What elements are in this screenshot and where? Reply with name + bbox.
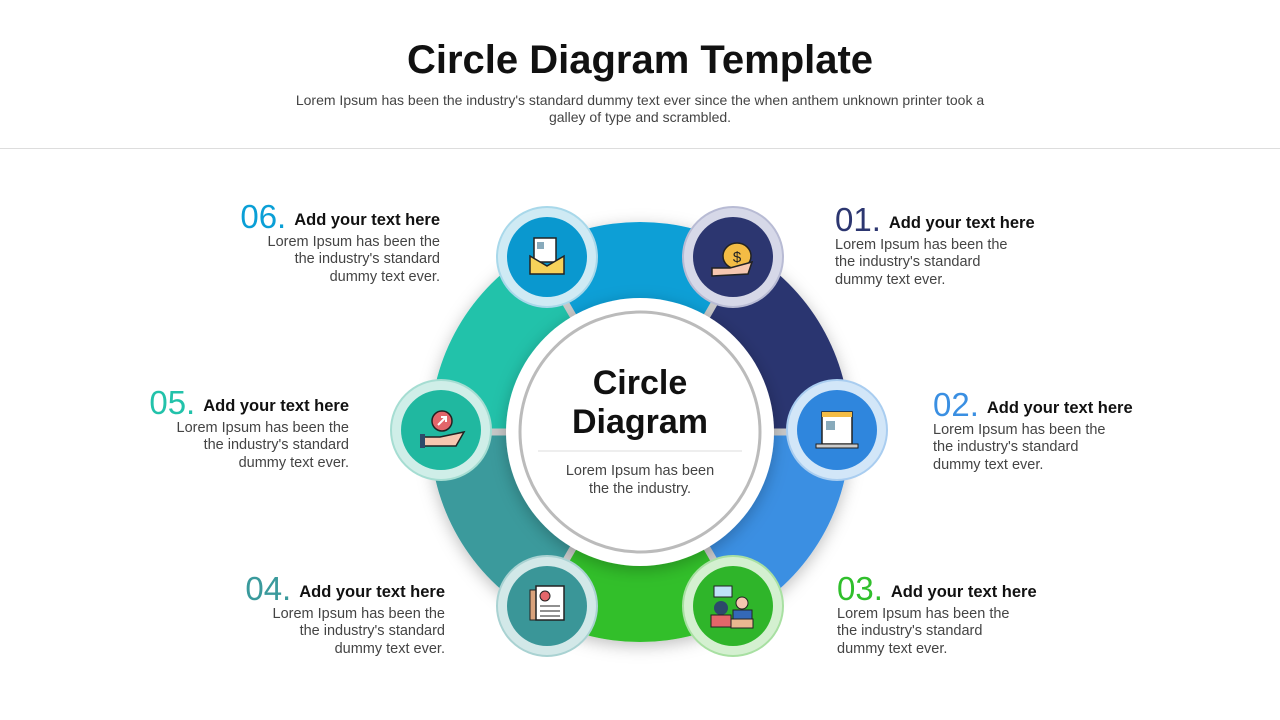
subtitle: galley of type and scrambled. [549,109,731,125]
item 01: 01. Add your text here [835,201,1035,238]
center circle: Lorem Ipsum has been [566,463,714,479]
node 01 money bag [683,207,783,307]
ring segments [430,222,850,642]
item 04: the industry's standard [300,623,445,639]
item 02: dummy text ever. [933,456,1043,472]
title: Circle Diagram Template [407,38,873,82]
node 03 people [683,556,783,656]
item 03 [837,570,1037,656]
center circle: the the industry. [589,481,691,497]
node 06 envelope [497,207,597,307]
item 06: the industry's standard [295,251,440,267]
item 02: the industry's standard [933,439,1078,455]
item 06: Lorem Ipsum has been the [268,234,440,250]
item 01: dummy text ever. [835,272,945,288]
item 01 [835,201,1035,288]
item 02 [933,386,1133,472]
item 01: Lorem Ipsum has been the [835,236,1008,252]
center circle: Diagram [572,403,708,441]
node 02 laptop [787,380,887,480]
item 04: dummy text ever. [335,640,445,656]
item 03: 03. Add your text here [837,570,1037,607]
center circle: Circle [593,364,687,402]
item 03: dummy text ever. [837,640,947,656]
item 06 [240,198,440,284]
item 06: dummy text ever. [330,268,440,284]
node 04 document [497,556,597,656]
item 03: the industry's standard [837,623,982,639]
item 05: Lorem Ipsum has been the [176,420,349,436]
item 05: dummy text ever. [239,454,349,470]
item 02: 02. Add your text here [933,386,1133,423]
item 02: Lorem Ipsum has been the [933,422,1106,438]
center circle [506,298,774,566]
item 04: 04. Add your text here [245,570,445,607]
item 03: Lorem Ipsum has been the [837,606,1010,622]
node 05 hand arrow [391,380,491,480]
item 04: Lorem Ipsum has been the [272,606,445,622]
item 01: the industry's standard [835,254,980,270]
item 05 [149,384,349,470]
item 05: 05. Add your text here [149,384,349,421]
item 04 [245,570,445,656]
node 01 money bag: $ [733,249,742,266]
subtitle [296,92,984,125]
subtitle: Lorem Ipsum has been the industry's standard dummy text ever since the when anthem unknown printer took a [296,92,984,108]
item 06: 06. Add your text here [240,198,440,235]
item 05: the industry's standard [204,437,349,453]
